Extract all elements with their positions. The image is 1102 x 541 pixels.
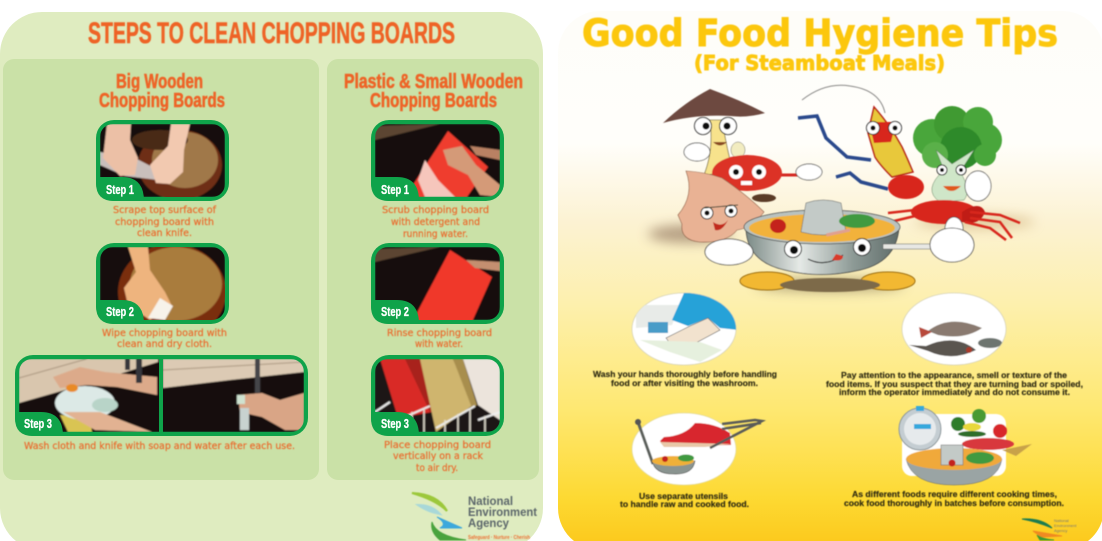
text: check food tip: food items. If you suspect that they are turning bad or spoiled, (826, 380, 1083, 389)
icon: timer vegetables meat and pot (899, 406, 1032, 485)
photo: step 2 wipe board (96, 243, 229, 324)
photo: step 1 scrub board (371, 120, 504, 201)
logo: national environment agency (412, 493, 537, 541)
logo: national environment agency: Agency (468, 516, 509, 530)
caption: step 2: clean and dry cloth. (117, 339, 212, 350)
icon: mushroom character (663, 89, 765, 175)
text: wash hands tip: food or after visiting the washroom. (611, 379, 758, 388)
heading: big wooden (99, 71, 225, 112)
icon: tongs with raw meat and ladle (632, 413, 762, 485)
icon: dumpling character (678, 171, 764, 242)
icon: steamboat pot character (705, 200, 974, 292)
caption: step 3: to air dry. (416, 463, 458, 474)
caption: step 2: Rinse chopping board (387, 328, 492, 339)
text: wash hands tip: Wash your hands thoroughly before handling (593, 370, 777, 379)
photo: step 3 air dry on rack (371, 355, 504, 436)
logo: national environment agency small: Agency (1054, 528, 1067, 533)
logo: national environment agency: National (468, 494, 513, 508)
heading: plastic and small wooden: Plastic & Small Wooden (344, 71, 523, 93)
photo: step 2 rinse board: Step 2 (381, 304, 409, 319)
text: check food tip: inform the operator immediately and do not consume it. (839, 388, 1070, 397)
caption: step 1 (382, 205, 489, 240)
title: good food hygiene tips: Good Food Hygiene Tips (582, 12, 1058, 55)
logo: national environment agency small: Environment (1054, 523, 1077, 528)
photo: step 2 wipe board: Step 2 (106, 304, 134, 319)
text: separate utensils tip (620, 492, 749, 509)
panel: food hygiene tips poster (558, 11, 1102, 541)
text: cook thoroughly tip: As different foods require different cooking times, (852, 490, 1057, 499)
heading: plastic and small wooden: Chopping Boards (370, 90, 497, 112)
icon: tomato character (712, 155, 822, 202)
caption: step 2: Wipe chopping board with (102, 328, 227, 339)
text: separate utensils tip: to handle raw and cooked food. (620, 500, 749, 509)
logo: national environment agency small: National (1054, 518, 1069, 523)
illustration: steamboat cartoon characters (648, 85, 1035, 292)
photo: step 3 air dry on rack: Step 3 (381, 416, 409, 431)
heading: plastic and small wooden (344, 71, 523, 112)
caption: step 3 (384, 440, 491, 474)
subtitle: for steamboat meals: (For Steamboat Meals) (694, 51, 945, 75)
icon: fish (902, 293, 1006, 365)
panel: plastic and small wooden chopping boards (327, 59, 539, 480)
caption: step 1: Scrape top surface of (113, 205, 217, 216)
heading: big wooden: Chopping Boards (99, 90, 225, 112)
tip: wash hands (593, 293, 777, 388)
caption: step 3: Place chopping board (384, 440, 491, 451)
title: steps to clean chopping boards: STEPS TO CLEAN CHOPPING BOARDS (88, 17, 455, 50)
text: separate utensils tip: Use separate utensils (639, 492, 729, 501)
photo: step 1 scrub board: Step 1 (381, 182, 409, 197)
panel: big wooden chopping boards (3, 59, 319, 480)
photo: step 2 rinse board (371, 243, 504, 324)
text: check food tip: Pay attention to the appearance, smell or texture of the (841, 371, 1068, 380)
text: check food tip (826, 371, 1083, 397)
logo: national environment agency small (1022, 518, 1077, 540)
heading: big wooden: Big Wooden (116, 71, 203, 93)
logo: national environment agency: Environment (468, 505, 537, 519)
tip: cook thoroughly (844, 406, 1064, 508)
caption: step 2 (102, 328, 227, 350)
panel: chopping board poster (0, 12, 543, 541)
caption: step 1: chopping board with (115, 217, 214, 228)
photo: step 3 wash cloth and knife (15, 355, 308, 436)
caption: step 1: clean knife. (137, 228, 192, 239)
logo: national environment agency: Safeguard · Nurture · Cherish (468, 535, 530, 541)
caption: step 2: with water. (415, 339, 463, 350)
caption: step 1: with detergent and (391, 217, 480, 228)
caption: step 1: Scrub chopping board (382, 205, 489, 216)
text: cook thoroughly tip: cook food thoroughly in batches before consumption. (844, 499, 1064, 508)
text: cook thoroughly tip (844, 490, 1064, 508)
text: wash hands tip (593, 370, 777, 388)
caption: step 2 (387, 328, 492, 350)
icon: prawn character (798, 85, 924, 199)
photo: step 3 wash cloth and knife: Step 3 (24, 416, 52, 431)
caption: step 1 (113, 205, 217, 239)
caption: step 3: vertically on a rack (393, 451, 483, 462)
caption: step 1: running water. (403, 229, 468, 240)
icon: washing hands (632, 293, 738, 365)
icon: crab character (888, 200, 1020, 241)
photo: step 1 scrape board (96, 120, 229, 201)
caption: step 3: Wash cloth and knife with soap and water after each use. (24, 441, 295, 452)
tip: separate utensils (620, 413, 762, 509)
icon: bok choy character (913, 106, 1002, 202)
tip: check food appearance (826, 293, 1083, 397)
photo: step 1 scrape board: Step 1 (106, 182, 134, 197)
